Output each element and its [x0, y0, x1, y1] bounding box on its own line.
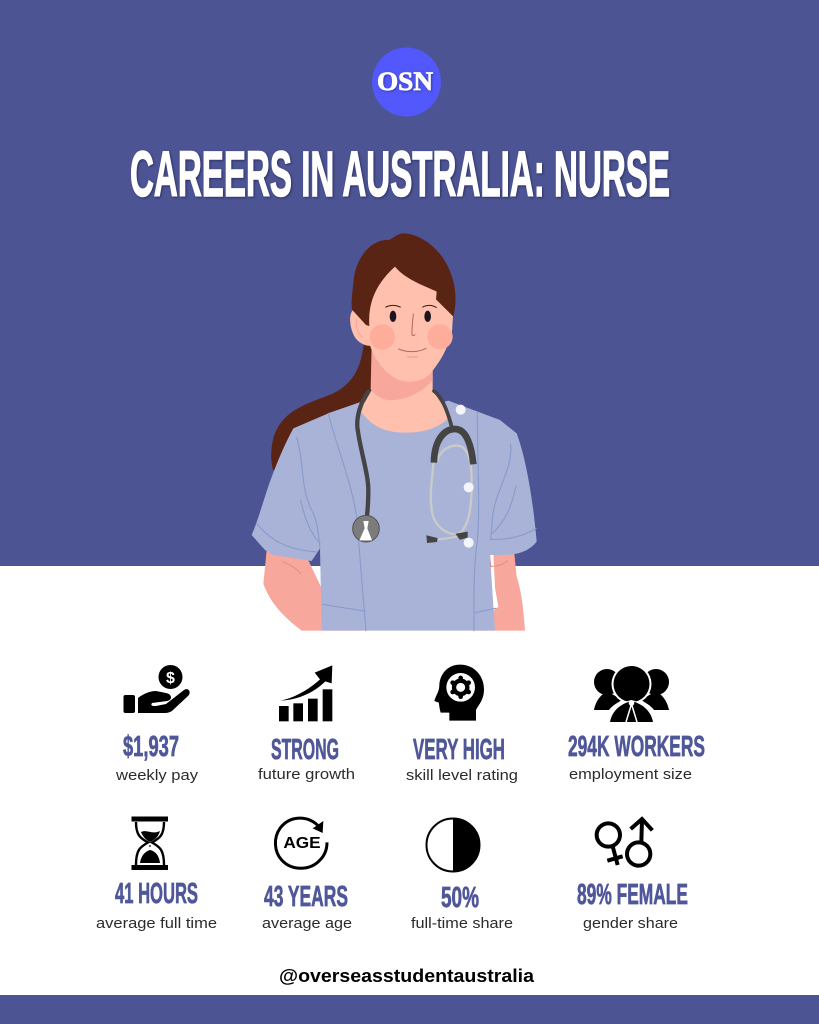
stat: future growth: future growth	[258, 766, 355, 783]
ear crease	[356, 318, 363, 337]
stat: future growth: STRONG	[271, 734, 339, 766]
icon: gender symbols	[597, 819, 652, 866]
ear	[350, 310, 373, 346]
stat: average age: average age	[262, 915, 352, 932]
arms	[263, 550, 525, 631]
icon: growth chart	[279, 665, 332, 721]
cheeks	[370, 324, 453, 350]
scrub seams	[257, 412, 536, 631]
stat: full-time share: full-time share	[411, 915, 513, 932]
stat: full-time share	[411, 882, 513, 932]
face	[367, 263, 454, 382]
stat: weekly pay: $1,937	[123, 731, 179, 763]
stethoscope	[353, 391, 473, 543]
eyes and brows	[385, 305, 437, 322]
stat: full-time share: 50%	[441, 882, 479, 914]
stat: weekly pay	[115, 731, 199, 784]
stat: average hours	[96, 878, 217, 932]
icon: age cycle	[275, 818, 327, 868]
stat: future growth	[258, 734, 355, 783]
icon: hand with coin: $	[166, 670, 175, 687]
social handle: @overseasstudentaustralia	[279, 966, 535, 986]
icon: hourglass	[132, 816, 168, 870]
stat: weekly pay: weekly pay	[115, 767, 199, 784]
stat: skill level	[406, 734, 518, 784]
logo badge: OSN	[377, 67, 433, 96]
neck	[360, 343, 450, 433]
icon: age cycle: AGE	[283, 835, 321, 852]
stat: average age	[262, 881, 352, 932]
neck shadow	[371, 343, 433, 400]
white gap beside arm	[490, 553, 496, 607]
icon: hand with coin	[124, 665, 190, 713]
nose and mouth	[399, 314, 426, 357]
ponytail	[271, 340, 377, 471]
stat: gender share	[577, 879, 688, 932]
stat: gender share: 89% FEMALE	[577, 879, 688, 911]
icon: workers group	[594, 664, 669, 724]
buttons	[456, 405, 474, 548]
stat: employment size: employment size	[569, 766, 692, 783]
icon: head with gear	[434, 665, 484, 721]
logo badge	[372, 48, 441, 116]
stat: average hours: 41 HOURS	[115, 878, 198, 910]
stat: skill level: skill level rating	[406, 767, 518, 784]
hair	[352, 233, 456, 326]
top background panel	[0, 0, 819, 566]
stat: employment size: 294K WORKERS	[568, 731, 705, 763]
stat: average hours: average full time	[96, 915, 217, 932]
nurse illustration	[252, 233, 537, 631]
stat: gender share: gender share	[583, 915, 678, 932]
bottom bar	[0, 995, 819, 1024]
stat: average age: 43 YEARS	[264, 881, 348, 913]
arm creases	[283, 560, 508, 574]
stat: employment size	[568, 731, 705, 783]
stat: skill level: VERY HIGH	[413, 734, 505, 766]
scrub top	[252, 401, 537, 631]
icon: half circle	[426, 818, 480, 872]
